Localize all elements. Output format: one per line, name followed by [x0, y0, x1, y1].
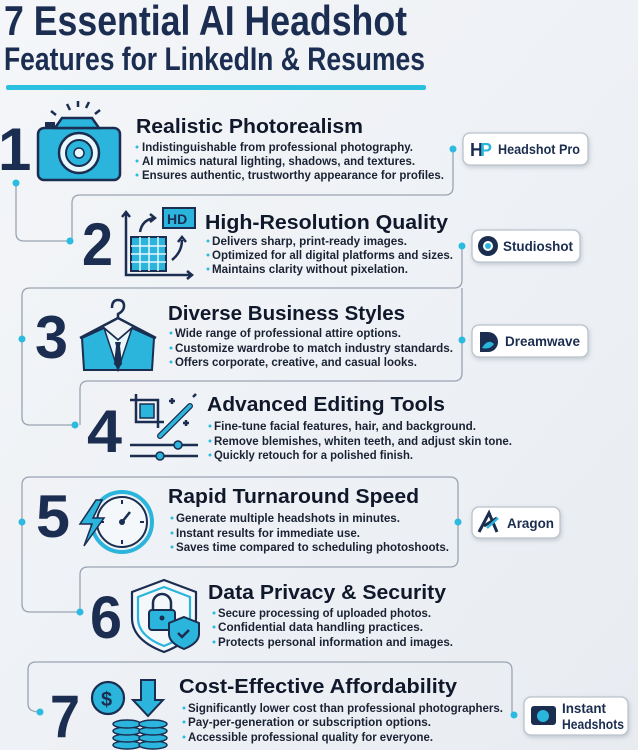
section 3: Diverse Business Styles [168, 303, 405, 325]
section 4: Fine-tune facial features, hair, and background. [214, 421, 476, 433]
section 4: Remove blemishes, whiten teeth, and adjust skin tone. [214, 436, 512, 448]
section 7: Pay-per-generation or subscription options. [188, 717, 431, 729]
section 5: 5 [36, 483, 70, 550]
section 2: 2 [82, 211, 113, 278]
section 3 [35, 300, 453, 371]
section 2: Maintains clarity without pixelation. [212, 264, 408, 276]
section 2: Delivers sharp, print-ready images. [212, 236, 407, 248]
section 5: Instant results for immediate use. [176, 528, 360, 540]
badge: Headshot Pro: Headshot Pro [498, 141, 580, 157]
icon: suit on hanger [80, 300, 156, 370]
section 4: Quickly retouch for a polished finish. [214, 450, 413, 462]
badge: Dreamwave [472, 325, 588, 357]
section 3: 3 [35, 304, 68, 371]
section 7: 7 [50, 683, 80, 750]
section 4: 4 [87, 398, 123, 465]
section 6: Secure processing of uploaded photos. [218, 608, 431, 620]
bullets: Indistinguishable from professional photography. [142, 142, 413, 154]
icon: HD grid: HD [167, 211, 187, 227]
icon: coins [92, 680, 167, 749]
icon: editing tools [130, 394, 198, 460]
section 5: Saves time compared to scheduling photoshoots. [176, 542, 449, 554]
section 6 [90, 580, 453, 652]
section 3: Wide range of professional attire options. [175, 328, 401, 340]
section 5: Generate multiple headshots in minutes. [176, 513, 400, 525]
section 6: 6 [90, 584, 122, 651]
section 3: Customize wardrobe to match industry standards. [175, 343, 453, 355]
section 6: Data Privacy & Security [208, 582, 447, 604]
badge: Instant Headshots [524, 697, 628, 735]
bullets: Ensures authentic, trustworthy appearance for profiles. [142, 170, 444, 182]
title: Features for LinkedIn & Resumes [4, 41, 425, 77]
section 6: Confidential data handling practices. [218, 622, 423, 634]
badge: Instant Headshots: Headshots [562, 716, 624, 732]
badge: Aragon: Aragon [507, 515, 554, 531]
section 7: Accessible professional quality for everyone. [188, 732, 433, 744]
section 2: High-Resolution Quality [205, 212, 449, 234]
icon: camera [38, 101, 120, 180]
icon: coins: $ [101, 689, 112, 711]
section 4: Advanced Editing Tools [207, 394, 445, 416]
section 1 [0, 101, 444, 183]
section 7 [50, 676, 503, 750]
bullets [136, 142, 444, 182]
section 4 [87, 394, 512, 465]
section 6: Protects personal information and images. [218, 637, 453, 649]
badge: Studioshot: Studioshot [503, 238, 573, 254]
title [4, 0, 425, 77]
badge: Headshot Pro: P [480, 140, 492, 160]
section 2 [82, 208, 453, 279]
icon: shield with lock [132, 580, 199, 652]
badge: Studioshot [472, 230, 580, 262]
section 5 [36, 483, 449, 554]
icon: stopwatch with lightning [80, 492, 152, 552]
badge: Aragon [472, 507, 560, 538]
section 2: Optimized for all digital platforms and sizes. [212, 250, 453, 262]
badge: Instant Headshots: Instant [562, 700, 606, 716]
badge: Dreamwave: Dreamwave [505, 333, 580, 349]
heading: Realistic Photorealism [136, 116, 363, 138]
badge: Headshot Pro: H [470, 140, 483, 160]
section 7: Cost-Effective Affordability [179, 676, 458, 698]
section 5: Rapid Turnaround Speed [168, 486, 419, 508]
bullets: AI mimics natural lighting, shadows, and textures. [142, 156, 415, 168]
badge: Headshot Pro [463, 133, 588, 165]
section 7: Significantly lower cost than professional photographers. [188, 703, 503, 715]
title underline [6, 85, 426, 90]
icon: HD grid [122, 208, 195, 279]
connector dots [12, 146, 518, 718]
section 3: Offers corporate, creative, and casual looks. [175, 357, 417, 369]
connectors [16, 149, 512, 715]
